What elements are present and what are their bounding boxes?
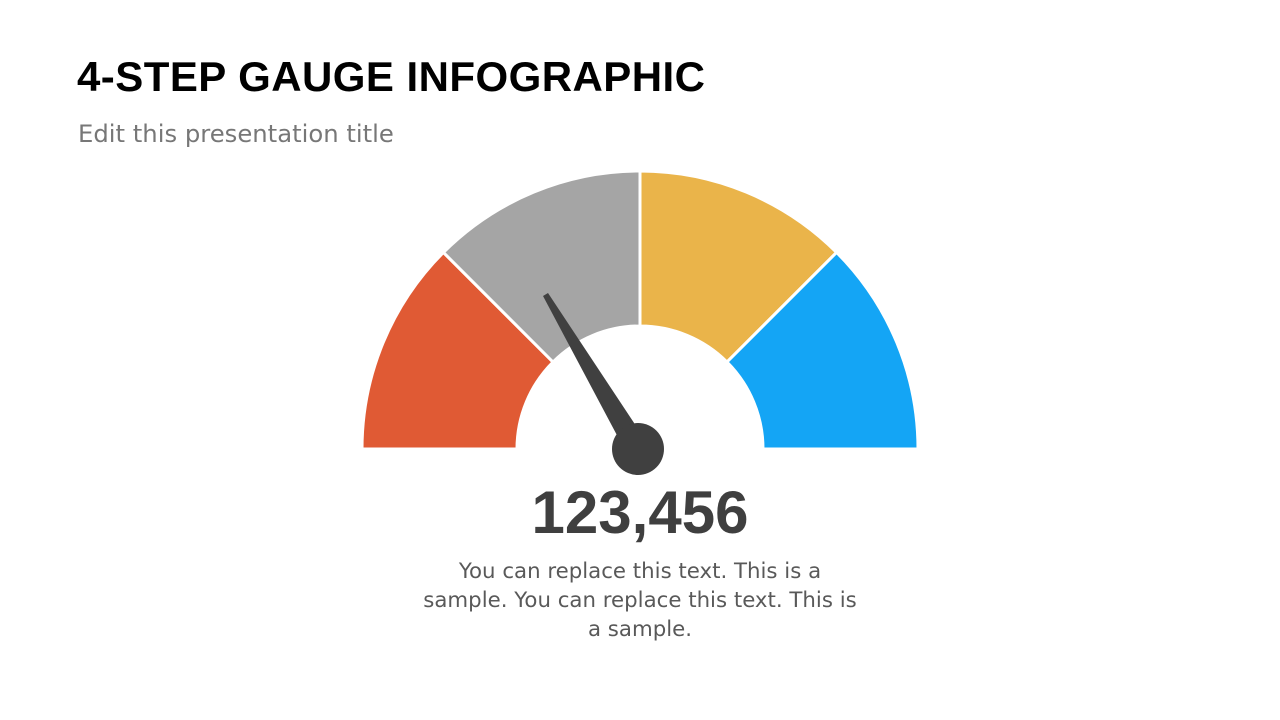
subtitle: Edit this presentation title bbox=[78, 119, 394, 148]
description text bbox=[423, 559, 857, 642]
description text: You can replace this text. This is a bbox=[459, 559, 821, 584]
segment: blue bbox=[727, 252, 918, 449]
segment: red bbox=[362, 252, 553, 449]
needle bbox=[543, 293, 664, 475]
description text: sample. You can replace this text. This is bbox=[423, 588, 857, 613]
segment: gray bbox=[443, 171, 640, 362]
segment: yellow bbox=[640, 171, 837, 362]
value number: 123,456 bbox=[532, 479, 748, 546]
title: 4-STEP GAUGE INFOGRAPHIC bbox=[77, 53, 705, 100]
description text: a sample. bbox=[588, 617, 692, 642]
